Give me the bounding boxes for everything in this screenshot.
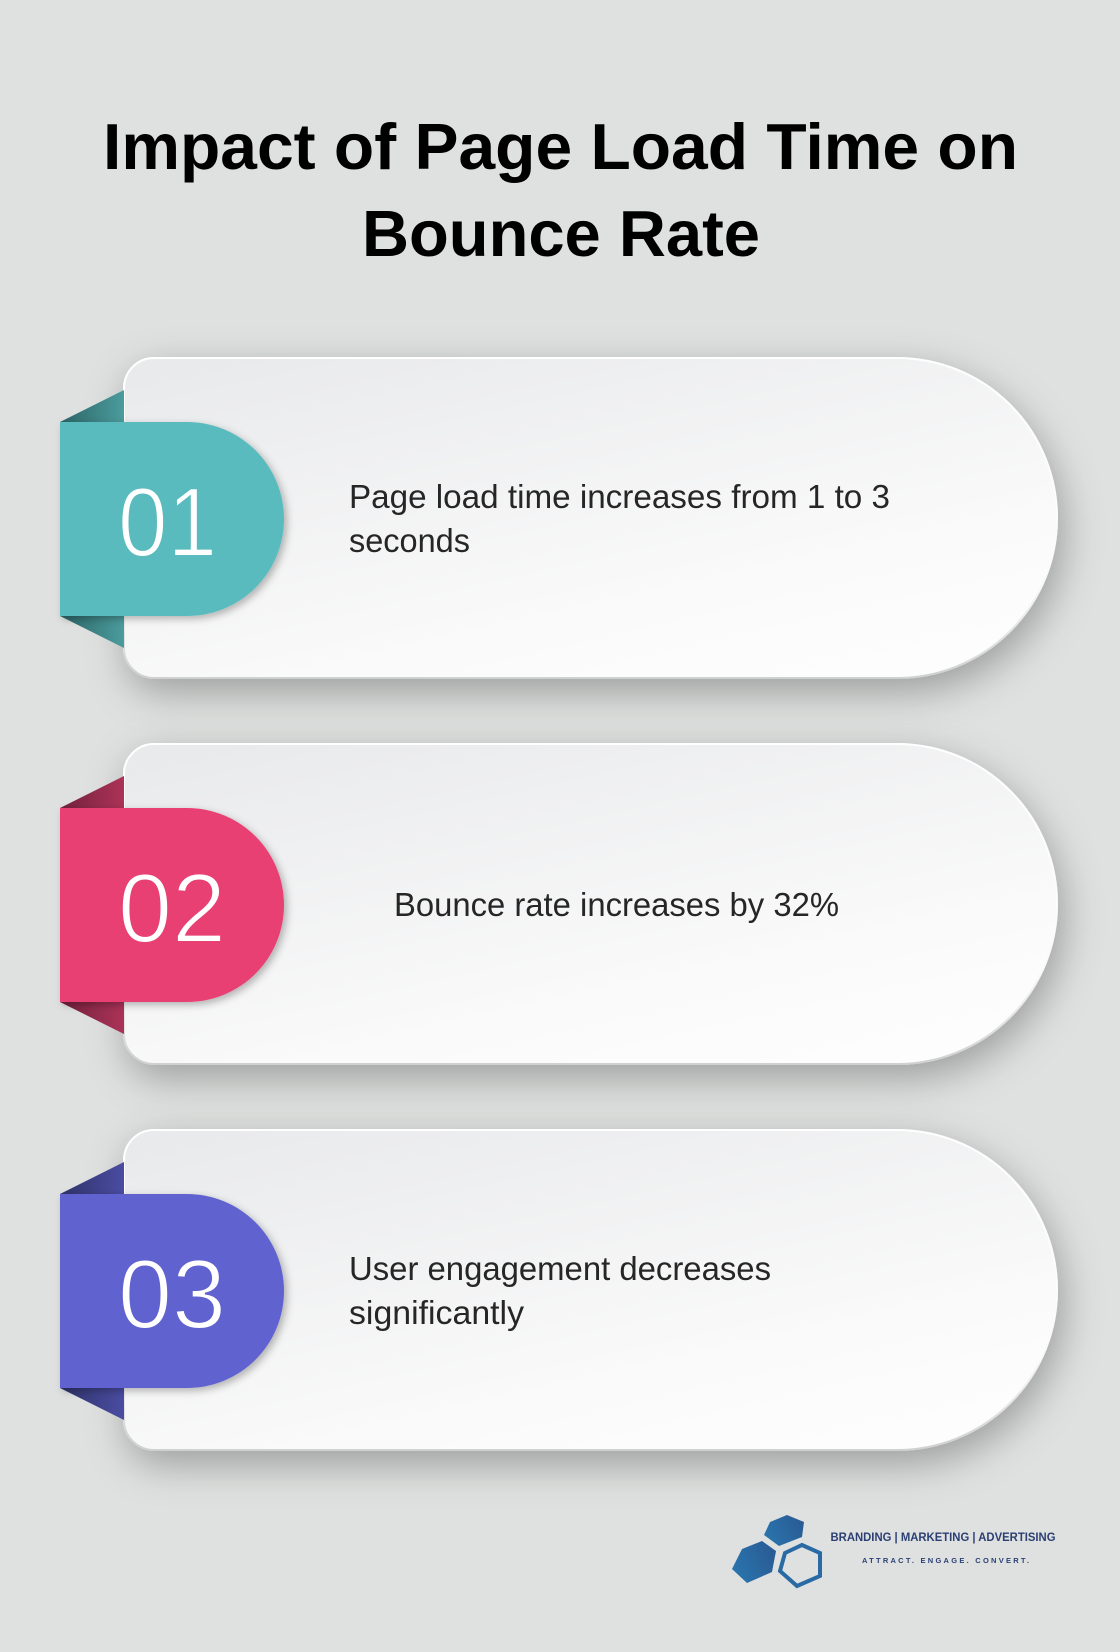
card 03 xyxy=(124,1130,1057,1450)
panel: step 03 xyxy=(60,1130,1057,1450)
text 03: significantly xyxy=(349,1294,525,1331)
logo tagline: BRANDING | MARKETING | ADVERTISING xyxy=(830,1530,1056,1544)
text 03: User engagement decreases xyxy=(349,1250,771,1287)
title xyxy=(103,110,1018,270)
number 02: 02 xyxy=(118,853,226,963)
logo tagline xyxy=(830,1530,1056,1565)
number badge 01 xyxy=(60,422,284,616)
text 03 xyxy=(349,1250,771,1331)
ribbon fold bottom 01 xyxy=(60,616,124,648)
text 01 xyxy=(349,478,890,559)
text 02: Bounce rate increases by 32% xyxy=(394,886,839,923)
ribbon fold top 02 xyxy=(60,776,124,808)
number 03: 03 xyxy=(118,1239,226,1349)
number 01: 01 xyxy=(118,467,217,577)
ribbon fold bottom 03 xyxy=(60,1388,124,1420)
icon: hexagons xyxy=(732,1515,820,1586)
number badge 02 xyxy=(60,808,284,1002)
ribbon fold bottom 02 xyxy=(60,1002,124,1034)
ribbon fold top 01 xyxy=(60,390,124,422)
panel: step 02 xyxy=(60,744,1057,1064)
logo xyxy=(732,1515,1056,1586)
text 01: seconds xyxy=(349,522,470,559)
card 02 xyxy=(124,744,1057,1064)
title: Impact of Page Load Time on xyxy=(103,110,1018,183)
card 01 xyxy=(124,358,1057,678)
text 01: Page load time increases from 1 to 3 xyxy=(349,478,890,515)
title: Bounce Rate xyxy=(362,197,760,270)
logo tagline: ATTRACT. ENGAGE. CONVERT. xyxy=(862,1556,1029,1565)
ribbon fold top 03 xyxy=(60,1162,124,1194)
panel: step 01 xyxy=(60,358,1057,678)
number badge 03 xyxy=(60,1194,284,1388)
